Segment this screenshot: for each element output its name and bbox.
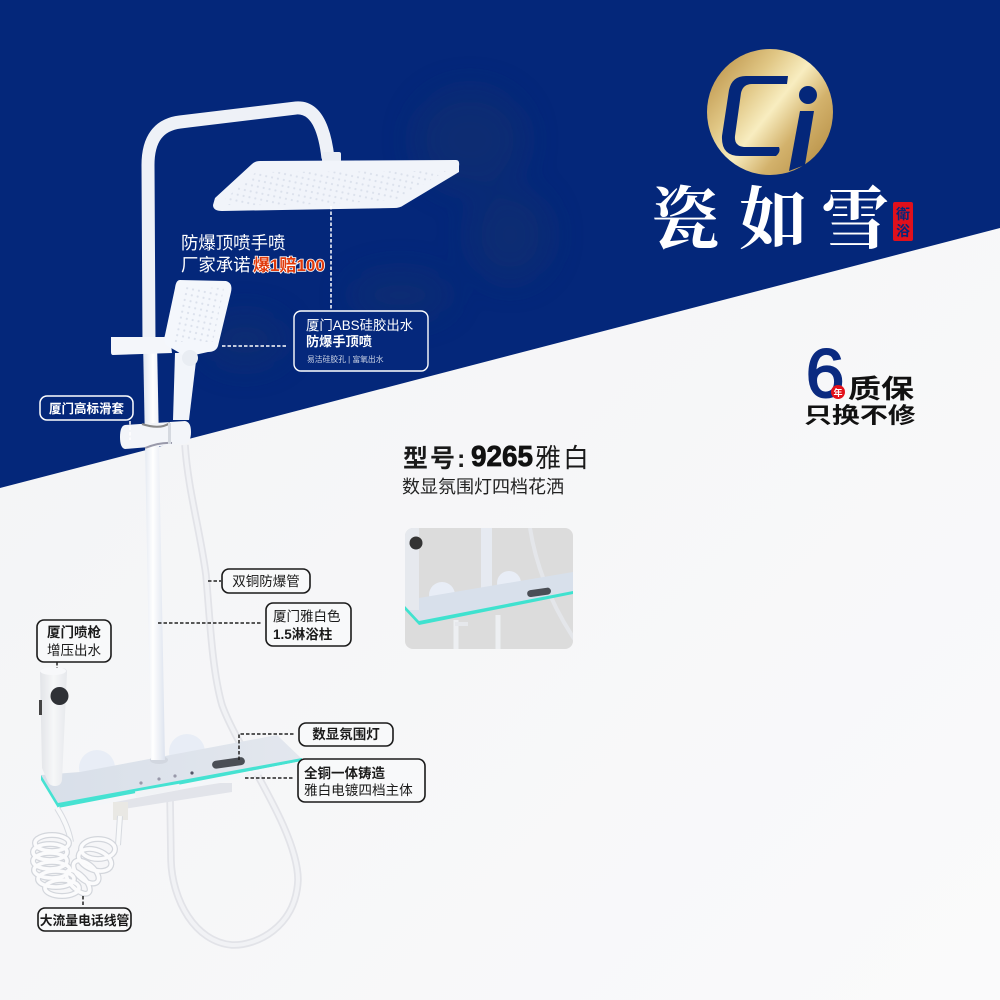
callout: shower column: 1.5淋浴柱 (273, 626, 333, 642)
callout: double copper hose (208, 569, 310, 593)
headline: explosion proof promise (181, 233, 325, 275)
six year warranty badge: 6 (806, 335, 844, 412)
six year warranty badge (804, 335, 916, 428)
callout: spray gun (37, 620, 111, 668)
shower arm and upper riser (148, 108, 328, 345)
six year warranty badge: 年 (833, 387, 843, 398)
callout: spray gun: 增压出水 (47, 643, 101, 658)
callout: brass body (245, 759, 425, 802)
rain shower head (213, 152, 459, 211)
shelf control body (41, 735, 302, 820)
hand shower (164, 280, 231, 420)
model title: 9265 (471, 441, 533, 473)
callout: ambient light display (239, 723, 393, 760)
callout: slider sleeve: 厦门高标滑套 (49, 401, 124, 416)
callout: shower column: 厦门雅白色 (273, 608, 340, 624)
six year warranty badge: 只换不修 (804, 404, 916, 428)
spray gun (39, 667, 68, 786)
callout: shower column (158, 603, 351, 646)
headline: explosion proof promise: 厂家承诺 (181, 255, 251, 275)
coiled phone-cord hose (33, 808, 120, 898)
logo: brand name: 瓷 (651, 166, 719, 263)
slide bracket (111, 337, 172, 355)
callout: ABS anti-burst hand shower: 易洁硅胶孔 | 富氧出水 (307, 354, 384, 364)
callout: brass body: 全铜一体铸造 (304, 765, 385, 781)
callout: double copper hose: 双铜防爆管 (232, 574, 300, 589)
callout: ABS anti-burst hand shower: 厦门ABS硅胶出水 (306, 317, 414, 333)
model title: 雅白 (535, 443, 591, 473)
valve knobs (79, 734, 205, 786)
callout: ambient light display: 数显氛围灯 (312, 726, 380, 742)
model subtitle: 数显氛围灯四档花洒 (402, 477, 564, 497)
six year warranty badge: 质保 (848, 375, 914, 404)
callout: brass body: 雅白电镀四档主体 (304, 782, 413, 798)
logo: red seal: 浴 (896, 223, 910, 239)
riser column (143, 340, 165, 760)
sliding clamp (120, 421, 191, 449)
logo: brand name (651, 166, 889, 263)
thumbnail: ambient light detail (405, 528, 575, 649)
headline: explosion proof promise: 防爆顶喷手喷 (181, 233, 285, 253)
logo: brand name: 如 (739, 166, 807, 263)
callout: phone-cord hose (38, 896, 131, 931)
hand shower hose (170, 445, 298, 945)
logo: Ci gold circle (707, 49, 833, 175)
callout: ABS anti-burst hand shower: 防爆手顶喷 (306, 333, 372, 349)
callout: phone-cord hose: 大流量电话线管 (40, 913, 129, 928)
headline: explosion proof promise: 爆1赔100 (253, 256, 325, 275)
model title: 型号: (403, 445, 467, 473)
callout: spray gun: 厦门喷枪 (47, 624, 101, 640)
callout: ABS anti-burst hand shower (222, 206, 428, 371)
model title (403, 441, 591, 473)
blue diagonal banner (0, 0, 1000, 488)
logo: red seal: 衛 (896, 206, 910, 222)
logo: brand name: 雪 (821, 166, 889, 263)
logo: red seal (893, 202, 913, 241)
callout: slider sleeve (40, 396, 133, 440)
